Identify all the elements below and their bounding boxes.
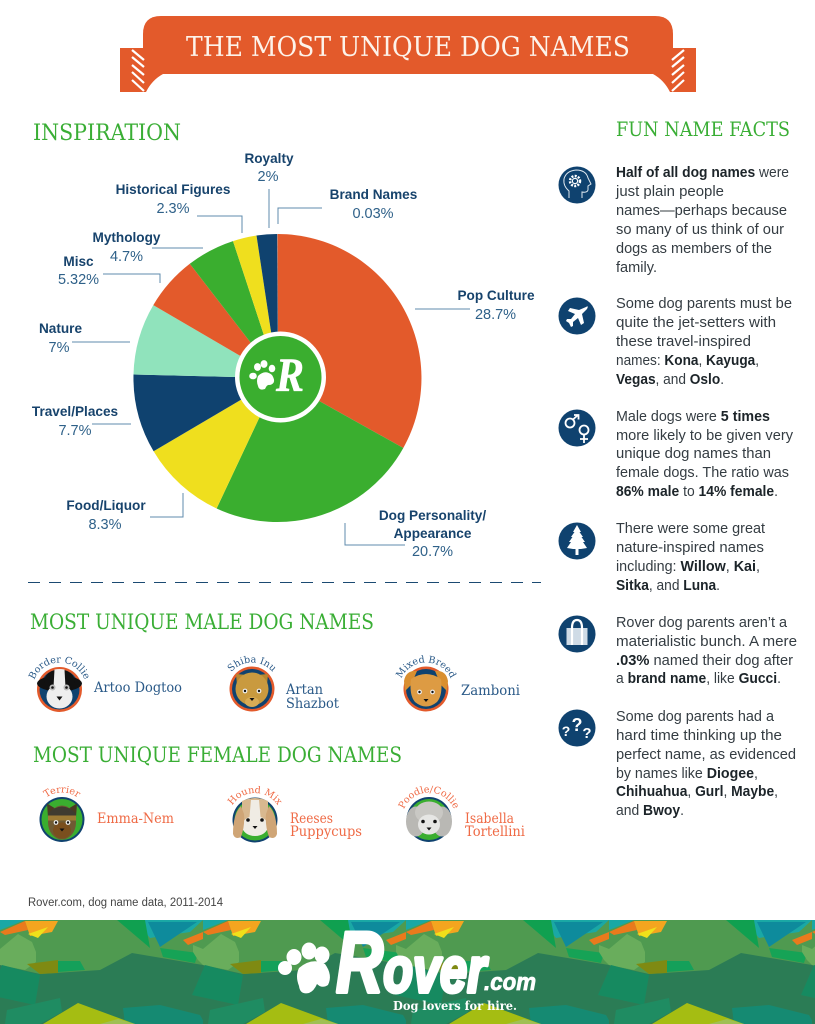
- heading: inspiration: INSPIRATION: [33, 121, 181, 146]
- fact 4: including: Willow, Kai,: [616, 559, 760, 575]
- pie label: nature: 7%: [49, 340, 70, 356]
- icon: question marks: ?: [572, 715, 582, 735]
- fact 1: dogs as members of the: [616, 241, 772, 257]
- pie label: food/liquor: 8.3%: [88, 517, 122, 533]
- pie label: food/liquor: Food/Liquor: [66, 498, 146, 513]
- name: [290, 811, 362, 840]
- female dog: hound mix: [227, 786, 362, 842]
- pie label: travel/places: 7.7%: [58, 423, 92, 439]
- footer logo: Dog lovers for hire.: [393, 998, 517, 1013]
- fact 4: There were some great: [616, 521, 765, 537]
- fact 1: so many of us think of our: [616, 222, 784, 238]
- name: Zamboni: [461, 683, 521, 699]
- name: Isabella: [465, 811, 514, 827]
- male dog: border collie: [28, 656, 182, 712]
- pie label: historical figures: Historical Figures: [116, 182, 230, 197]
- pie label: dog personality/appearance: Appearance: [394, 526, 472, 541]
- footer logo: Rover: [336, 915, 488, 1011]
- female dog: terrier: Terrier: [42, 786, 80, 797]
- footer logo: .com: [484, 969, 536, 996]
- pie label: dog personality/appearance: 20.7%: [412, 544, 453, 560]
- pie label: historical figures: 2.3%: [156, 201, 190, 217]
- pie label: dog personality/appearance: Dog Personality/: [379, 508, 486, 523]
- pie label: nature: [39, 321, 130, 356]
- heading: fun name facts: FUN NAME FACTS: [616, 117, 790, 141]
- pie chart: [133, 234, 421, 522]
- fact 2: these travel-inspired: [616, 334, 751, 350]
- fact 3: unique dog names than: [616, 446, 771, 462]
- fact 2: names: Kona, Kayuga,: [616, 353, 759, 369]
- icon: paw: [278, 942, 330, 993]
- fact 6: and Bwoy.: [616, 803, 684, 819]
- pie label: mythology: [93, 230, 203, 265]
- fact 4: Sitka, and Luna.: [616, 578, 720, 594]
- pie centre logo: [235, 332, 326, 422]
- fact 2: Some dog parents must be: [616, 296, 792, 312]
- female dog: poodle/collie: Poodle/Collie: [398, 786, 458, 809]
- pie label: royalty: Royalty: [244, 151, 294, 166]
- name: Artan: [285, 682, 323, 698]
- fact 2: Vegas, and Oslo.: [616, 372, 724, 388]
- fact 5: Rover dog parents aren’t a: [616, 615, 788, 631]
- pie label: brand names: Brand Names: [330, 187, 417, 202]
- fact 5: materialistic bunch. A mere: [616, 634, 797, 650]
- fact 2: [558, 296, 792, 388]
- fact 3: [558, 409, 794, 500]
- female dog: poodle/collie: [398, 786, 526, 842]
- fact 5: [558, 615, 797, 687]
- fact 6: hard time thinking up the: [616, 728, 782, 744]
- fact 1: [558, 165, 789, 276]
- fact 1: names—perhaps because: [616, 203, 787, 219]
- footer band: [0, 915, 815, 1024]
- source note: Rover.com, dog name data, 2011-2014: [28, 897, 224, 909]
- fact 6: by names like Diogee,: [616, 766, 758, 782]
- pie label: nature: Nature: [39, 321, 82, 336]
- icon: airplane: [558, 298, 596, 334]
- pie label: dog personality/appearance: [345, 508, 486, 560]
- name: [465, 811, 526, 840]
- icon: pine tree: [558, 522, 596, 560]
- female dog: terrier: [40, 786, 174, 842]
- fact 3: female dogs. The ratio was: [616, 465, 789, 481]
- name: Artoo Dogtoo: [93, 680, 182, 696]
- icon: shopping bag: [558, 616, 596, 652]
- name: Reeses: [290, 811, 333, 827]
- fact 1: just plain people: [615, 184, 724, 200]
- pie label: pop culture: Pop Culture: [457, 288, 535, 303]
- heading: female names: MOST UNIQUE FEMALE DOG NAMES: [33, 743, 402, 767]
- name: Emma-Nem: [97, 811, 174, 827]
- fact 1: family.: [616, 260, 657, 276]
- fact 2: quite the jet-setters with: [616, 315, 776, 331]
- pie centre logo: R: [275, 349, 304, 402]
- fact 5: .03% named their dog after: [616, 653, 793, 669]
- heading: male names: MOST UNIQUE MALE DOG NAMES: [30, 610, 374, 634]
- footer logo: [278, 915, 536, 1013]
- fact 6: perfect name, as evidenced: [616, 747, 796, 763]
- pie label: travel/places: [32, 404, 131, 439]
- female dog: hound mix: Hound Mix: [227, 786, 282, 806]
- icon: question marks: ?: [582, 725, 592, 742]
- pie label: brand names: 0.03%: [352, 206, 394, 222]
- male dog: border collie: Border Collie: [28, 656, 88, 680]
- pie label: misc: Misc: [63, 254, 94, 269]
- icon: head with gear: [558, 166, 596, 204]
- pie label: mythology: Mythology: [93, 230, 161, 245]
- pie label: food/liquor: [66, 493, 183, 533]
- name: Tortellini: [465, 824, 526, 840]
- fact 3: 86% male to 14% female.: [616, 484, 778, 500]
- name: [285, 682, 340, 712]
- male dog: mixed breed: [395, 655, 521, 712]
- name: Shazbot: [286, 696, 340, 712]
- pie label: mythology: 4.7%: [110, 249, 143, 265]
- male dog: shiba inu: Shiba Inu: [228, 656, 276, 672]
- pie label: travel/places: Travel/Places: [32, 404, 118, 419]
- male dog: mixed breed: Mixed Breed: [395, 655, 457, 678]
- fact 1: Half of all dog names were: [616, 165, 789, 181]
- pie label: royalty: [244, 151, 294, 228]
- fact 5: a brand name, like Gucci.: [616, 671, 781, 687]
- male dog: shiba inu: [228, 656, 340, 712]
- title banner: [120, 16, 696, 92]
- pie label: historical figures: [116, 182, 242, 233]
- fact 6: Chihuahua, Gurl, Maybe,: [616, 784, 778, 800]
- icon: question marks: ?: [562, 723, 570, 739]
- fact 4: nature-inspired names: [616, 540, 764, 556]
- icon: gender symbols: [558, 410, 596, 446]
- pie label: royalty: 2%: [258, 169, 279, 185]
- fact 6: Some dog parents had a: [616, 709, 775, 725]
- fact 6: [558, 709, 796, 819]
- fact 4: [558, 521, 765, 594]
- name: Puppycups: [290, 824, 362, 840]
- pie label: brand names: [278, 187, 417, 224]
- pie label: pop culture: 28.7%: [475, 307, 516, 323]
- pie label: pop culture: [415, 288, 535, 323]
- pie label: misc: [58, 254, 160, 288]
- title text: THE MOST UNIQUE DOG NAMES: [186, 32, 630, 63]
- fact 3: more likely to be given very: [616, 428, 794, 444]
- icon: question marks: [558, 710, 596, 746]
- pie label: misc: 5.32%: [58, 272, 99, 288]
- fact 3: Male dogs were 5 times: [616, 409, 770, 425]
